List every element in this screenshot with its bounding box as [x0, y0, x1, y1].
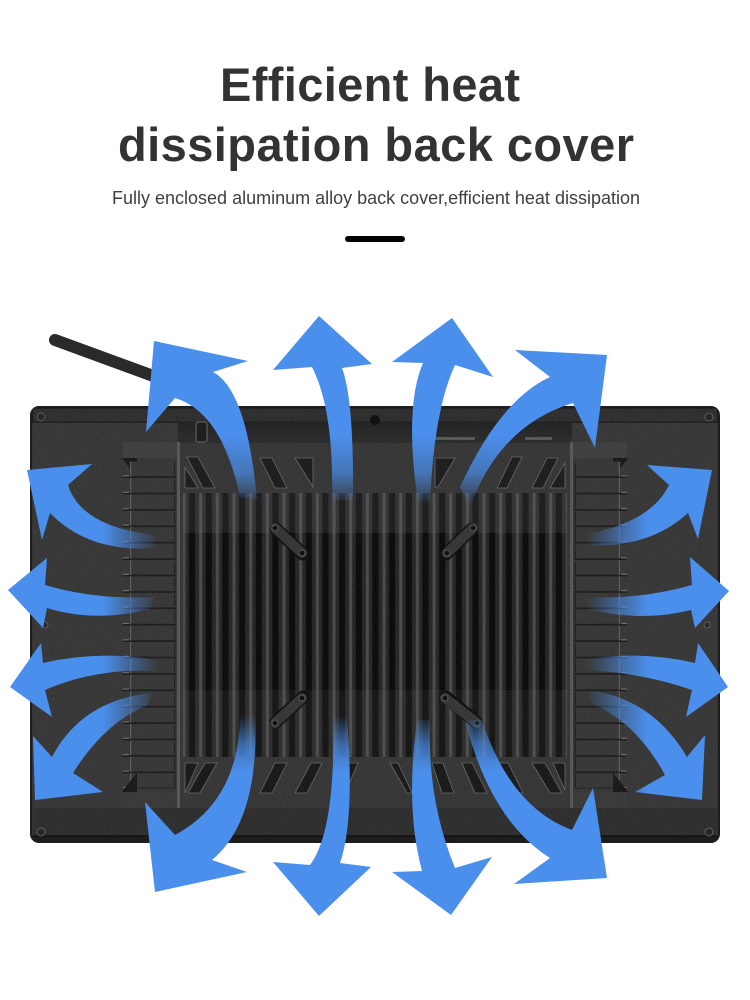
- arrow: right 1: [575, 465, 712, 546]
- title: [118, 58, 634, 171]
- arrow: right 2: [582, 557, 729, 628]
- panel: heat sink: [122, 442, 628, 808]
- arrow: up-left: [146, 341, 257, 500]
- left fin flange: [122, 442, 178, 808]
- bottom vent slots: [185, 763, 565, 793]
- right fin flange: [572, 442, 628, 808]
- icon: antenna: [55, 340, 156, 377]
- arrow: right 3: [582, 643, 728, 717]
- central frame: [178, 443, 572, 808]
- panel: device back cover: [30, 406, 720, 843]
- arrow: up-right: [460, 350, 607, 507]
- arrow: left 3: [10, 643, 157, 717]
- arrow: down centre-left: [273, 717, 371, 916]
- arrow: up centre-right: [392, 318, 493, 503]
- arrow: left 1: [27, 464, 167, 549]
- mounting brackets: [272, 525, 480, 726]
- title divider bar: [345, 236, 405, 242]
- arrow: right 4: [588, 690, 705, 800]
- arrow: up centre-left: [273, 316, 372, 500]
- arrow: down-left: [145, 713, 255, 892]
- arrow: down centre-right: [392, 720, 492, 915]
- title: dissipation back cover: [118, 118, 634, 171]
- vertical cooling ridges: [183, 493, 567, 757]
- arrow: left 4: [33, 693, 152, 800]
- subtitle: Fully enclosed aluminum alloy back cover,efficient heat dissipation: [112, 188, 640, 208]
- title: Efficient heat: [220, 58, 520, 111]
- arrow: down-right: [465, 720, 607, 884]
- arrow: left 2: [8, 558, 155, 628]
- metal grain texture: [33, 408, 717, 836]
- top vent slots: [185, 457, 565, 488]
